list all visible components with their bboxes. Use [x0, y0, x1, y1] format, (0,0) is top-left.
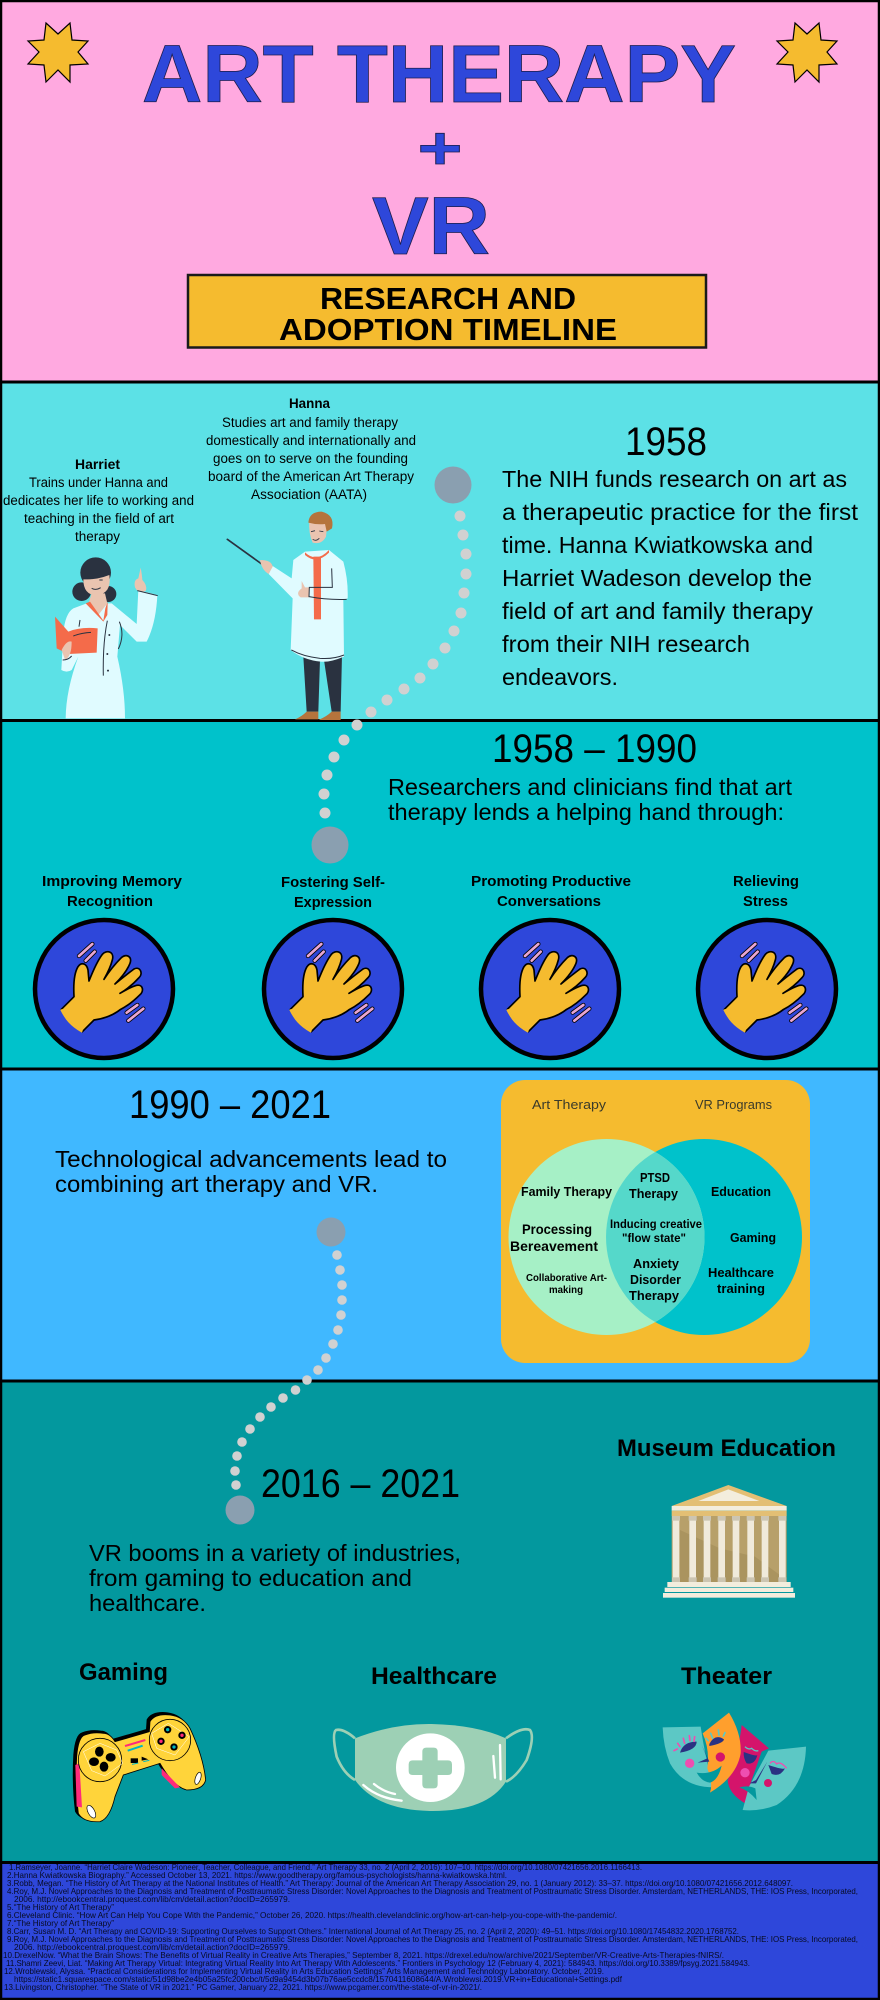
subtitle banner: ADOPTION TIMELINE — [279, 312, 617, 347]
text block: 2016-2021: healthcare. — [89, 1590, 206, 1616]
benefit: Relieving Stress: Relieving — [733, 874, 799, 890]
text block: 2016-2021: from gaming to education and — [89, 1565, 412, 1591]
timeline: dotted path — [226, 466, 472, 1524]
chart: venn diagram: Collaborative Art- — [526, 1273, 607, 1284]
panel: 1958 background — [0, 382, 880, 720]
panel: title background — [0, 0, 880, 382]
benefit: Promoting Productive Conversations: Promoting Productive — [471, 874, 631, 890]
chart: venn diagram: Processing — [522, 1222, 592, 1237]
text block: Harriet: therapy — [75, 529, 120, 544]
text block: references: 2006. http://ebookcentral.proquest.com/lib/cm/detail.action?docID=265979. — [14, 1895, 290, 1904]
panel: references background — [0, 1862, 880, 2000]
benefit: Promoting Productive Conversations: Conversations — [497, 894, 601, 910]
text block: 1958-1990 — [388, 727, 793, 825]
text block: references: 3.Robb, Megan. “The History of Art Therapy at the National Institutes of Health.” Art Therapy: Journal of the American Art Therapy Association 29, no. 1 (January 2012): 33–37. https://doi.org/10.1080/07421656.2012.648097. — [7, 1879, 793, 1888]
text block: 1958: 1958 — [625, 420, 707, 464]
text block: 2016-2021 — [89, 1462, 461, 1616]
text block: 1958: Harriet Wadeson develop the — [502, 565, 812, 591]
text block: references: 7.“The History of Art Therapy” — [7, 1919, 114, 1928]
icon: theater masks — [663, 1713, 806, 1810]
subtitle banner — [188, 275, 706, 348]
benefit: Fostering Self-Expression: Fostering Self- — [281, 875, 385, 891]
text block: references: 8.Carr, Susan M. D. “Art Therapy and COVID-19: Supporting Ourselves to Support Others.” International Journal of Art Therapy 25, no. 2 (April 2, 2020): 49–51. https://doi.org/10.1080/17454832.2020.1768752. — [7, 1927, 739, 1936]
heading: Theater: Theater — [681, 1663, 772, 1690]
text block: Hanna: domestically and internationally and — [206, 433, 416, 448]
chart: venn diagram: Art Therapy — [532, 1097, 607, 1112]
text block: Hanna: Association (AATA) — [251, 487, 367, 502]
panel: 1958-1990 background — [0, 720, 880, 1069]
chart: venn diagram: Anxiety — [633, 1257, 679, 1271]
text block: references: 5.“The History of Art Therapy” — [7, 1903, 114, 1912]
heading: Healthcare: Healthcare — [371, 1663, 497, 1690]
chart: venn diagram: training — [717, 1282, 765, 1296]
illustration: Harriet — [55, 557, 158, 718]
benefit: Relieving Stress: Stress — [743, 894, 788, 910]
text block: Hanna: Hanna — [289, 396, 330, 411]
chart: venn diagram: Family Therapy — [521, 1185, 612, 1199]
icon: right star — [777, 23, 837, 82]
text block: 2016-2021: 2016 – 2021 — [261, 1462, 460, 1506]
title: + — [418, 115, 462, 182]
chart: venn diagram — [501, 1080, 810, 1363]
icon: left star — [28, 23, 88, 82]
chart: venn diagram: Bereavement — [510, 1239, 599, 1254]
panel: 2016-2021 background — [0, 1381, 880, 1862]
benefit: Fostering Self-Expression: Expression — [294, 895, 372, 911]
text block: 1958: from their NIH research — [502, 631, 750, 657]
benefit: Promoting Productive Conversations — [471, 874, 631, 1058]
subtitle banner: RESEARCH AND — [320, 281, 576, 316]
text block: 1958: time. Hanna Kwiatkowska and — [502, 532, 813, 558]
text block: references: 4.Roy, M.J. Novel Approaches to the Diagnosis and Treatment of Posttraumatic Stress Disorder: Novel Approaches to the Diagnosis and Treatment of Posttraumatic Stress Disorder. Amsterdam, NETHERLANDS, THE: IOS Press, Incorporated, — [7, 1887, 858, 1896]
text block: references: 1.Ramseyer, Joanne. “Harriet Claire Wadeson: Pioneer, Teacher, Colleague, and Friend.” Art Therapy 33, no. 2 (April 2, 2016): 107–10. https://doi.org/10.1080/07421656.2016.1166413. — [9, 1863, 642, 1872]
text block: 1990-2021: combining art therapy and VR. — [55, 1171, 378, 1197]
text block: Harriet: Harriet — [75, 457, 121, 472]
text block: references: 13.Livingston, Christopher. “The State of VR in 2021.” PC Gamer, January 22, 2021. https://www.pcgamer.com/the-state-of-vr-in-2021/. — [4, 1983, 482, 1992]
chart: venn diagram: Healthcare — [708, 1266, 774, 1280]
benefit: Improving Memory Recognition: Recognition — [67, 894, 153, 910]
text block: Harriet — [3, 457, 194, 544]
text block: 1958: a therapeutic practice for the first — [502, 499, 859, 525]
text block: references: 11.Shamri Zeevi, Liat. “Making Art Therapy Virtual: Integrating Virtual Reality Into Art Therapy With Adolescents.” Frontiers in Psychology 12 (February 4, 2021): 584943. https://doi.org/10.3389/fpsyg.2021.584943. — [6, 1959, 750, 1968]
text block: 1990-2021: 1990 – 2021 — [129, 1083, 331, 1127]
text block: references — [3, 1863, 858, 1992]
text block: 1958-1990: 1958 – 1990 — [492, 727, 697, 771]
panel: 1990-2021 background — [0, 1069, 880, 1381]
icon: face mask — [334, 1724, 532, 1811]
title: VR — [372, 181, 490, 272]
chart: venn diagram: PTSD — [640, 1171, 670, 1185]
illustration: Hanna — [227, 512, 348, 720]
text block: references: 9.Roy, M.J. Novel Approaches to the Diagnosis and Treatment of Posttraumatic Stress Disorder: Novel Approaches to the Diagnosis and Treatment of Posttraumatic Stress Disorder. Amsterdam, NETHERLANDS, THE: IOS Press, Incorporated, — [7, 1935, 858, 1944]
text block: 1958-1990: therapy lends a helping hand through: — [388, 799, 784, 825]
text block: references: 12.Wroblewski, Alyssa. “Practical Considerations for Implementing Virtual Reality in Arts Education Settings” Arts Management and Technology Laboratory. October, 2019. — [4, 1967, 604, 1976]
chart: venn diagram: Gaming — [730, 1231, 776, 1245]
benefit: Improving Memory Recognition: Improving Memory — [42, 874, 182, 890]
heading: Museum Education: Museum Education — [617, 1435, 836, 1462]
chart: venn diagram: making — [549, 1285, 583, 1296]
text block: Hanna: board of the American Art Therapy — [208, 469, 414, 484]
title — [142, 29, 736, 272]
benefit: Improving Memory Recognition — [35, 874, 182, 1058]
text block: 1958 — [502, 420, 859, 690]
text block: Harriet: dedicates her life to working and — [3, 493, 194, 508]
text block: references: https://static1.squarespace.com/static/51d98be2e4b05a25fc200cbc/t/5d9a9454d3b07b76ae5ccdc8/1570411608644/A.Wroblewsi.2019.VR+in+Educational+Settings.pdf — [14, 1975, 623, 1984]
chart: venn diagram: Inducing creative — [610, 1219, 702, 1231]
chart: venn diagram: Therapy — [629, 1187, 678, 1201]
icon: museum building — [663, 1485, 795, 1598]
text block: 1958: The NIH funds research on art as — [502, 466, 847, 492]
text block: Hanna: Studies art and family therapy — [222, 415, 398, 430]
title: ART THERAPY — [142, 29, 736, 120]
chart: venn diagram: VR Programs — [695, 1097, 772, 1112]
chart: venn diagram: Education — [711, 1185, 771, 1199]
text block: 1958: field of art and family therapy — [502, 598, 814, 624]
chart: venn diagram: Disorder — [630, 1273, 681, 1287]
chart: venn diagram: "flow state" — [622, 1233, 686, 1245]
text block: 1990-2021 — [55, 1083, 447, 1197]
text block: references: 2.Hanna Kwiatkowska Biography.” Accessed October 13, 2021. https://www.goodtherapy.org/famous-psychologists/hanna-kwiatkowska.html. — [7, 1871, 507, 1880]
text block: 1958: endeavors. — [502, 664, 618, 690]
text block: Harriet: teaching in the field of art — [24, 511, 174, 526]
text block: references: 6.Cleveland Clinic. “How Art Can Help You Cope With the Pandemic,” October 26, 2020. https://health.clevelandclinic.org/how-art-can-help-you-cope-with-the-pandemic/. — [7, 1911, 617, 1920]
text block: 1958-1990: Researchers and clinicians find that art — [388, 774, 793, 800]
text block: references: 10.DrexelNow. “What the Brain Shows: The Benefits of Virtual Reality in Creative Arts Therapies,” September 8, 2021. https://drexel.edu/now/archive/2021/September/VR-Creative-Arts-Therapies-fNIRS/. — [3, 1951, 724, 1960]
heading: Gaming: Gaming — [79, 1659, 168, 1686]
text block: Hanna — [206, 396, 416, 502]
text block: Harriet: Trains under Hanna and — [29, 475, 168, 490]
text block: references: 2006. http://ebookcentral.proquest.com/lib/cm/detail.action?docID=265979. — [14, 1943, 290, 1952]
text block: 2016-2021: VR booms in a variety of industries, — [89, 1540, 461, 1566]
benefit: Fostering Self-Expression — [264, 875, 402, 1058]
icon: game controller — [73, 1713, 206, 1822]
chart: venn diagram: Therapy — [629, 1289, 679, 1303]
text block: 1990-2021: Technological advancements lead to — [55, 1146, 447, 1172]
benefit: Relieving Stress — [698, 874, 836, 1058]
text block: Hanna: goes on to serve on the founding — [213, 451, 408, 466]
